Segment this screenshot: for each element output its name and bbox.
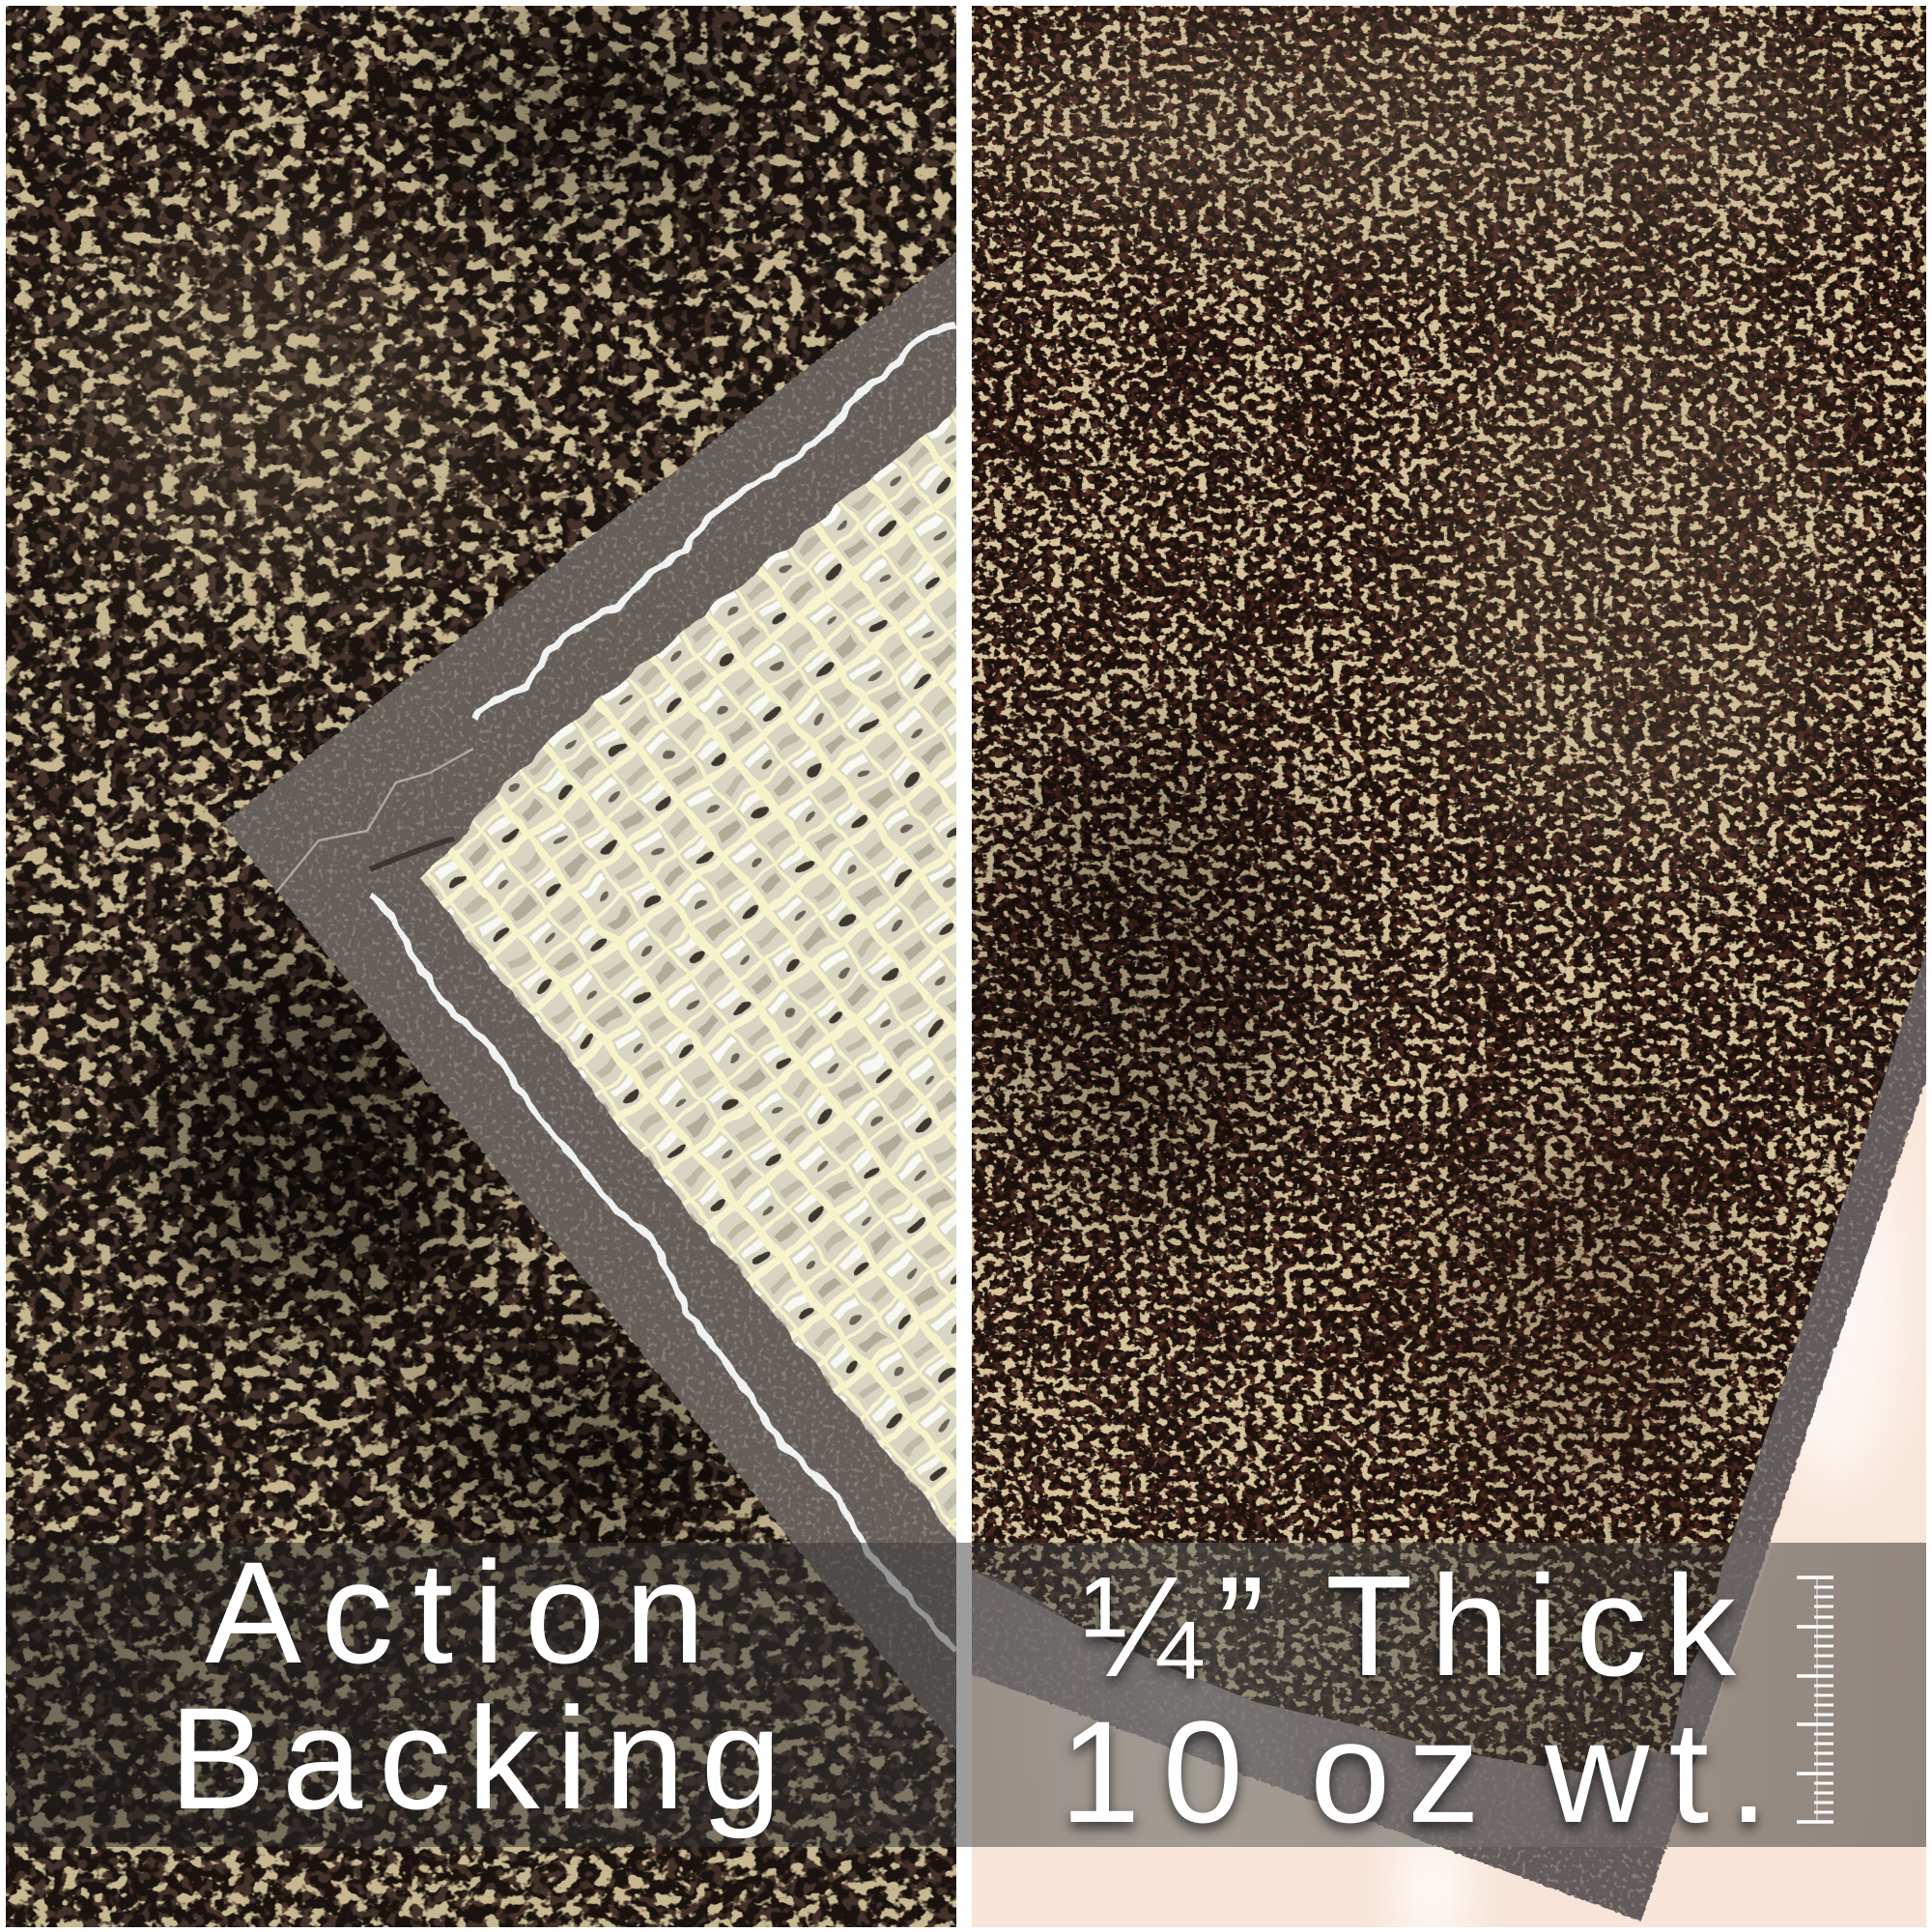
icon: ruler scale — [1797, 1577, 1833, 1822]
caption: thickness and weight: 10 — [1060, 1690, 1243, 1853]
caption: thickness and weight — [1060, 1547, 1769, 1853]
carpet pile: right panel — [972, 0, 1926, 1927]
mat binding: right panel — [966, 850, 1932, 1921]
caption: action backing: Backing — [169, 1677, 781, 1839]
caption: thickness and weight: ¼ — [1082, 1548, 1204, 1707]
panel: action backing photo — [6, 6, 962, 1927]
caption: thickness and weight: ” — [1217, 1548, 1264, 1707]
stitching: lower edge — [370, 894, 956, 1651]
floor background — [972, 6, 1926, 1932]
caption: thickness and weight: wt. — [1544, 1690, 1769, 1853]
panel: thickness photo — [966, 0, 1932, 1932]
corner fold shadow — [370, 838, 454, 869]
caption: thickness and weight: Thick — [1325, 1547, 1737, 1706]
mat backing: cream mesh — [421, 406, 962, 1546]
binding highlight inside band — [972, 1543, 1774, 1921]
translucent caption band — [6, 1543, 1926, 1847]
mat backing: grey binding — [222, 252, 956, 1749]
caption: thickness and weight: oz — [1310, 1690, 1480, 1853]
stitching: upper edge — [474, 324, 956, 720]
carpet pile: left panel — [6, 6, 956, 1927]
caption: action backing — [169, 1531, 781, 1839]
caption: action backing: Action — [205, 1531, 705, 1693]
stitching: faint corner thread — [275, 749, 473, 894]
